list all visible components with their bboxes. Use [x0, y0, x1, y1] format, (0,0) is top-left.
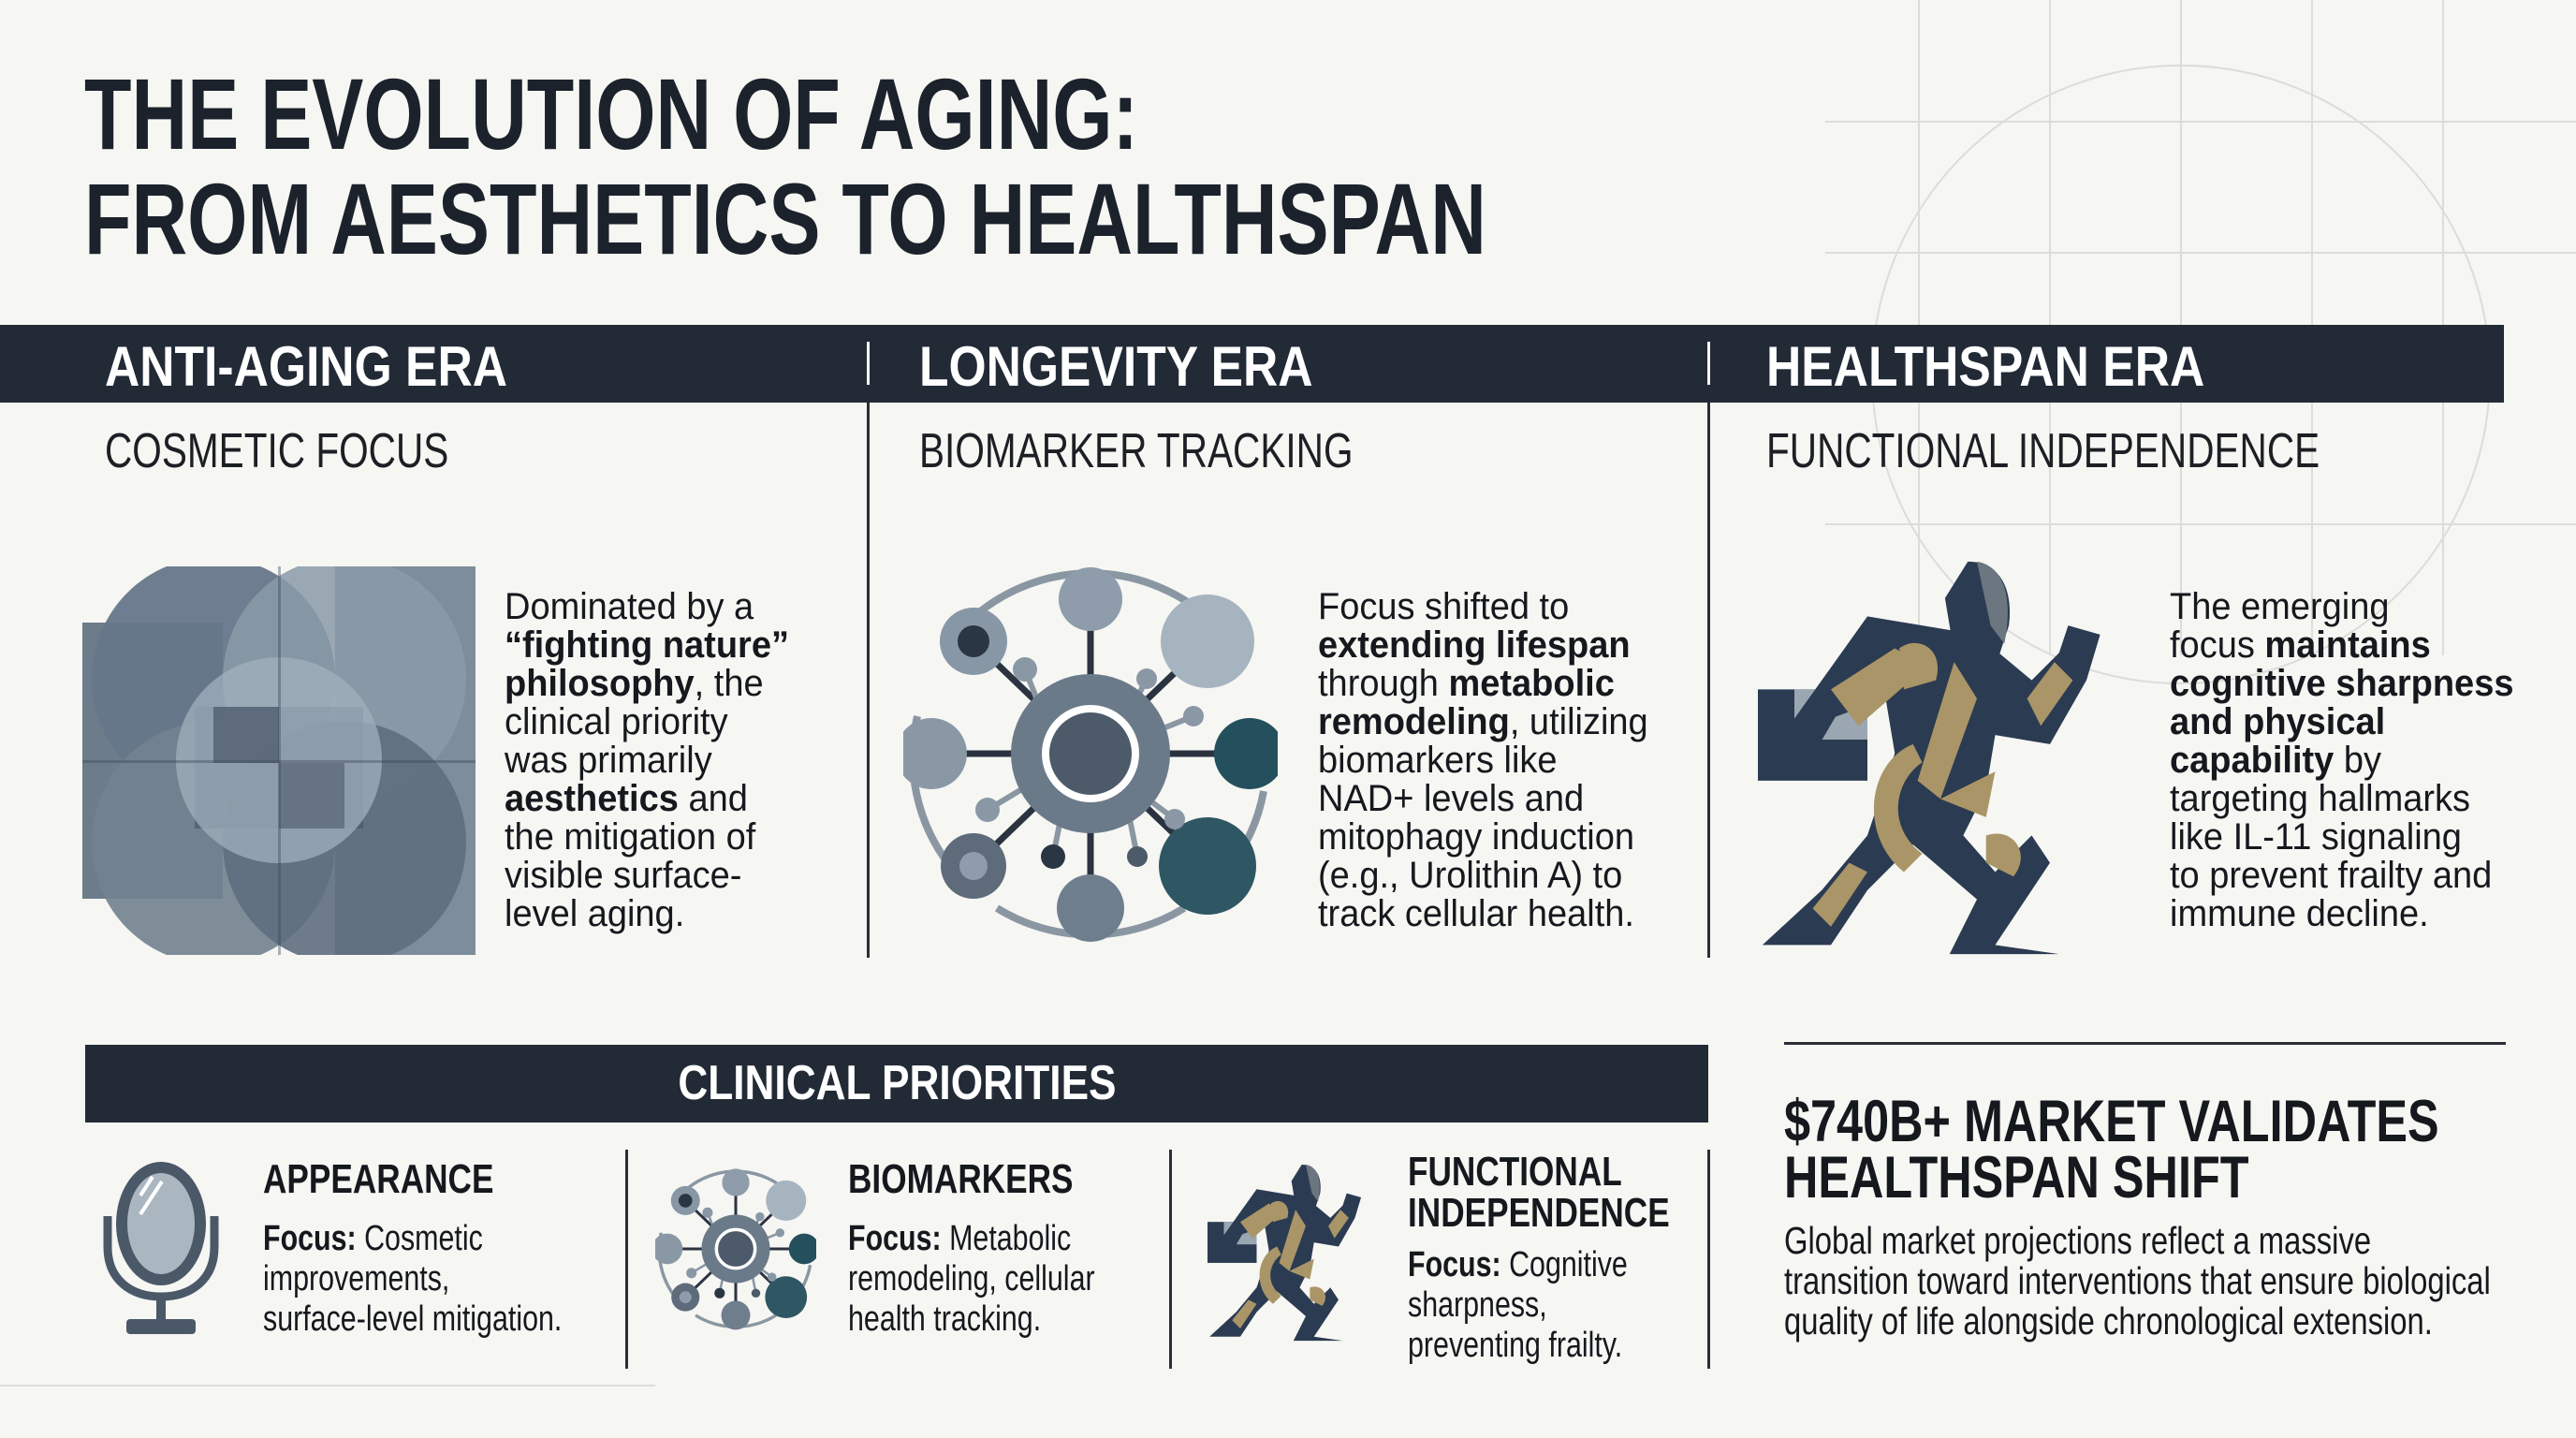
text: anti-aging description: philosophy, the [505, 663, 764, 704]
text: anti-aging description: level aging. [505, 893, 684, 934]
item: functional independence [1408, 1149, 1670, 1365]
text: healthspan description: immune decline. [2170, 893, 2429, 934]
item: appearance: APPEARANCE [263, 1156, 493, 1202]
header bar: ANTI-AGING ERA [105, 335, 507, 398]
subtitle: biomarker tracking: BIOMARKER TRACKING [919, 424, 1354, 478]
title [84, 57, 1486, 275]
text: anti-aging description [505, 586, 789, 934]
header bar: LONGEVITY ERA [919, 335, 1313, 398]
text: anti-aging description: Dominated by a [505, 586, 754, 627]
text: healthspan description: capability by [2170, 740, 2381, 781]
text: longevity description: mitophagy induction [1318, 816, 1634, 858]
text: longevity description: remodeling, utilizing [1318, 701, 1648, 742]
market callout: $740B+ MARKET VALIDATES [1784, 1089, 2439, 1154]
text: anti-aging description: aesthetics and [505, 778, 748, 819]
text: anti-aging description: was primarily [505, 740, 712, 781]
item: biomarkers: BIOMARKERS [848, 1156, 1074, 1202]
item: appearance: Focus: Cosmetic [263, 1219, 483, 1258]
item: functional independence: preventing frailty. [1408, 1326, 1622, 1365]
text: longevity description [1318, 586, 1648, 934]
subtitle: functional independence: FUNCTIONAL INDEPENDENCE [1766, 424, 2320, 478]
text: healthspan description: targeting hallmarks [2170, 778, 2470, 819]
item: functional independence: Focus: Cognitive [1408, 1245, 1628, 1284]
text: longevity description: (e.g., Urolithin A) to [1318, 855, 1622, 896]
text: longevity description: track cellular health. [1318, 893, 1634, 934]
text: longevity description: through metabolic [1318, 663, 1615, 704]
icon: mirror [103, 1162, 219, 1334]
header bar [0, 325, 2504, 403]
text: longevity description: extending lifespan [1318, 624, 1631, 666]
icon: small network [655, 1168, 816, 1329]
icon: small runner [1208, 1165, 1361, 1341]
text: healthspan description: focus maintains [2170, 624, 2431, 666]
text: healthspan description: cognitive sharpness [2170, 663, 2513, 704]
text: healthspan description [2170, 586, 2513, 934]
item: functional independence: FUNCTIONAL [1408, 1149, 1622, 1195]
clinical priorities bar [85, 1045, 1708, 1123]
item: biomarkers: remodeling, cellular [848, 1259, 1095, 1299]
text: longevity description: NAD+ levels and [1318, 778, 1584, 819]
market callout: quality of life alongside chronological extension. [1784, 1299, 2433, 1343]
item: biomarkers: health tracking. [848, 1299, 1041, 1339]
market callout: HEALTHSPAN SHIFT [1784, 1145, 2249, 1211]
icon: running figure [1758, 562, 2100, 955]
header bar: HEALTHSPAN ERA [1766, 335, 2204, 398]
item: functional independence: sharpness, [1408, 1285, 1547, 1325]
item: functional independence: INDEPENDENCE [1408, 1190, 1670, 1236]
subtitle: cosmetic focus: COSMETIC FOCUS [105, 424, 448, 478]
title: FROM AESTHETICS TO HEALTHSPAN [84, 162, 1486, 275]
text: healthspan description: The emerging [2170, 586, 2389, 627]
item: biomarkers [848, 1156, 1095, 1339]
market callout [1784, 1042, 2506, 1343]
item: appearance [263, 1156, 562, 1339]
text: healthspan description: and physical [2170, 701, 2385, 742]
market callout: transition toward interventions that ensure biological [1784, 1259, 2491, 1302]
text: anti-aging description: the mitigation of [505, 816, 755, 858]
icon: overlapping circles (cosmetic) [82, 566, 476, 955]
text: longevity description: biomarkers like [1318, 740, 1558, 781]
text: anti-aging description: clinical priority [505, 701, 728, 742]
clinical priorities bar: CLINICAL PRIORITIES [678, 1056, 1116, 1110]
item: biomarkers: Focus: Metabolic [848, 1219, 1071, 1258]
text: healthspan description: to prevent frailty and [2170, 855, 2492, 896]
title: THE EVOLUTION OF AGING: [84, 57, 1138, 170]
icon: biomarker network [903, 567, 1278, 942]
market callout: Global market projections reflect a massive [1784, 1219, 2371, 1262]
item: appearance: improvements, [263, 1259, 449, 1299]
text: healthspan description: like IL-11 signaling [2170, 816, 2462, 858]
text: anti-aging description: visible surface- [505, 855, 741, 896]
item: appearance: surface-level mitigation. [263, 1299, 562, 1339]
text: longevity description: Focus shifted to [1318, 586, 1569, 627]
text: anti-aging description: “fighting nature” [505, 624, 789, 666]
